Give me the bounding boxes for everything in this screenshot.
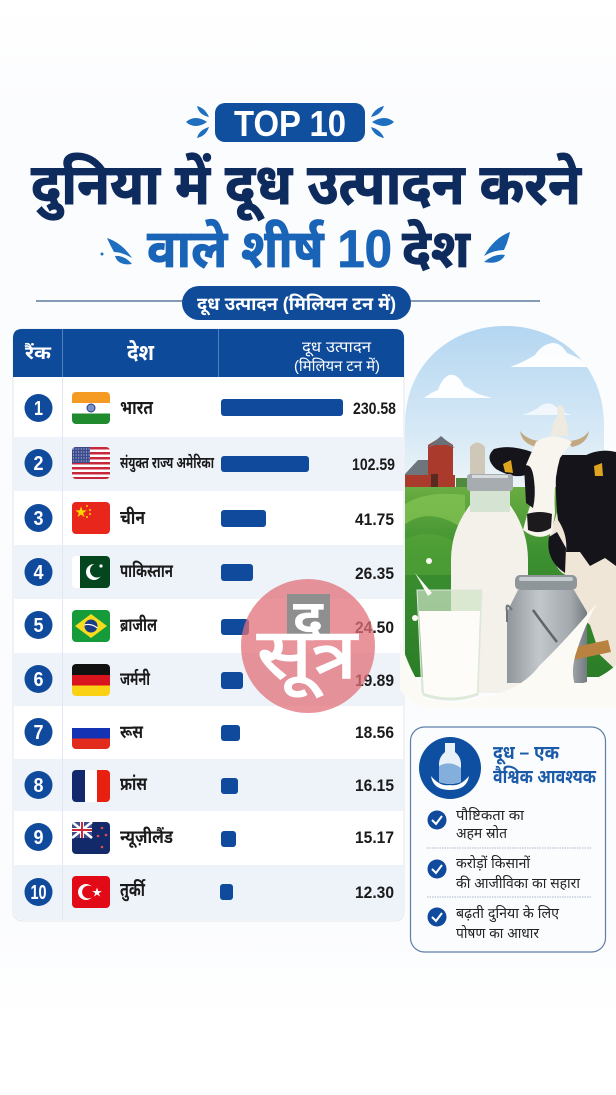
row 9: New Zealand: 15.17 <box>355 828 394 847</box>
row 4: Pakistan: 4 <box>34 562 44 584</box>
subtitle pill: दूध उत्पादन (मिलियन टन में) <box>197 293 396 316</box>
point 3: बढ़ती दुनिया के लिए <box>456 904 559 923</box>
point 2: की आजीविका का सहारा <box>456 875 580 891</box>
row 3: China: चीन <box>120 507 145 529</box>
flag: India <box>72 392 110 424</box>
wooden handle <box>570 640 611 660</box>
icon: bottle badge <box>419 737 481 799</box>
icon: left milk drops <box>186 106 209 138</box>
subtitle rule <box>36 300 540 302</box>
milk can <box>507 575 587 683</box>
panel heading: वैश्विक आवश्यक <box>493 765 597 788</box>
row 7: Russia: 7 <box>34 722 44 744</box>
row 4: Pakistan: पाकिस्तान <box>120 561 174 581</box>
table header: दूध उत्पादन <box>302 339 372 357</box>
row 8: France <box>24 770 394 802</box>
flag: Russia <box>72 728 110 749</box>
row 1: India: भारत <box>120 398 154 419</box>
row 10: Turkey <box>24 876 394 908</box>
row 3: China <box>24 502 394 534</box>
point 2 <box>428 855 580 891</box>
top 10 badge: TOP 10 <box>234 103 346 144</box>
row 3: China: 3 <box>34 508 44 530</box>
row 6: Germany: जर्मनी <box>120 668 150 689</box>
row 7: Russia: रूस <box>120 722 144 742</box>
row 6: Germany: 6 <box>34 669 44 691</box>
row 10: Turkey: 10 <box>30 882 46 904</box>
row 2: USA: संयुक्त राज्य अमेरिका <box>120 453 214 473</box>
icon: left splash drop <box>100 238 132 264</box>
watermark: the sootr logo: द <box>293 590 324 646</box>
flag: Brazil <box>72 610 110 642</box>
flag: Turkey: ★ <box>92 888 102 899</box>
row 7: Russia <box>24 717 394 749</box>
flag: France <box>72 770 110 802</box>
icon: red barn <box>405 436 467 487</box>
row 5: Brazil: 5 <box>34 615 44 637</box>
row 3: China: 41.75 <box>355 510 394 529</box>
cow body <box>550 470 616 670</box>
row 2: USA: 102.59 <box>352 455 395 474</box>
sky <box>405 326 604 487</box>
row 8: France: फ्रांस <box>120 774 148 794</box>
striped rows <box>14 437 403 920</box>
row 5: Brazil <box>24 610 394 642</box>
row 5: Brazil: 24.50 <box>355 618 394 637</box>
watermark: the sootr logo: सूत्र <box>257 615 359 698</box>
subtitle pill <box>182 286 411 320</box>
table header <box>13 329 404 377</box>
flag: New Zealand <box>72 822 110 854</box>
point 1: पौष्टिकता का <box>456 807 524 823</box>
row 2: USA <box>24 447 395 479</box>
row 1: India <box>24 392 396 424</box>
row 6: Germany: 19.89 <box>355 671 394 690</box>
row 10: Turkey: तुर्की <box>120 878 146 902</box>
flag: Turkey <box>72 876 110 908</box>
icon: clouds <box>424 343 592 415</box>
table body <box>13 329 404 921</box>
flag: Germany <box>72 664 110 696</box>
table header: रैंक <box>24 342 52 363</box>
point 1: अहम स्रोत <box>456 825 508 841</box>
milk droplets <box>412 558 432 621</box>
table header: देश <box>127 340 154 365</box>
title line 1: दुनिया में दूध उत्पादन करने <box>31 152 582 221</box>
row 1: India: 1 <box>34 398 43 420</box>
icon: right splash drop <box>484 232 510 263</box>
title line 2: देश <box>402 219 471 279</box>
watermark: the sootr logo <box>241 579 375 713</box>
panel heading <box>493 743 597 788</box>
panel: ranking table <box>13 329 404 921</box>
panel heading: दूध – एक <box>493 743 560 765</box>
milk splash <box>400 603 616 708</box>
grass <box>404 487 616 677</box>
point 3: पोषण का आधार <box>456 925 539 941</box>
row 7: Russia: 18.56 <box>355 723 394 742</box>
milk bottle <box>451 474 528 693</box>
cow head <box>523 436 572 537</box>
row 9: New Zealand <box>24 822 394 854</box>
illustration: farm, cow and milk <box>400 326 616 708</box>
table header: (मिलियन टन में) <box>294 357 380 375</box>
icon: silo <box>470 442 485 475</box>
icon: right milk drops <box>371 106 394 138</box>
panel: milk global need <box>410 727 606 952</box>
row 5: Brazil: ब्राजील <box>120 615 158 635</box>
cow muzzle <box>527 512 552 532</box>
flag: USA <box>72 447 110 479</box>
row 9: New Zealand: 9 <box>34 827 44 849</box>
cow ears <box>489 447 532 476</box>
flag: China: ★ <box>75 505 87 519</box>
point 3 <box>428 904 559 941</box>
row 10: Turkey: 12.30 <box>355 883 394 902</box>
flag: Pakistan <box>72 556 110 588</box>
glass of milk <box>417 590 482 700</box>
row 2: USA: 2 <box>34 453 44 475</box>
row 4: Pakistan: 26.35 <box>355 564 394 583</box>
title line 2: वाले शीर्ष 10 <box>147 219 392 279</box>
point 1 <box>428 807 524 841</box>
row 4: Pakistan <box>24 556 394 588</box>
row 9: New Zealand: न्यूज़ीलैंड <box>120 826 174 849</box>
row 8: France: 8 <box>34 775 44 797</box>
row 8: France: 16.15 <box>355 776 394 795</box>
cow poll <box>551 405 568 436</box>
row 1: India: 230.58 <box>353 399 396 418</box>
cow horns <box>520 431 542 447</box>
point 2: करोड़ों किसानों <box>456 855 530 871</box>
flag: China <box>72 502 110 534</box>
row 6: Germany <box>24 664 394 696</box>
